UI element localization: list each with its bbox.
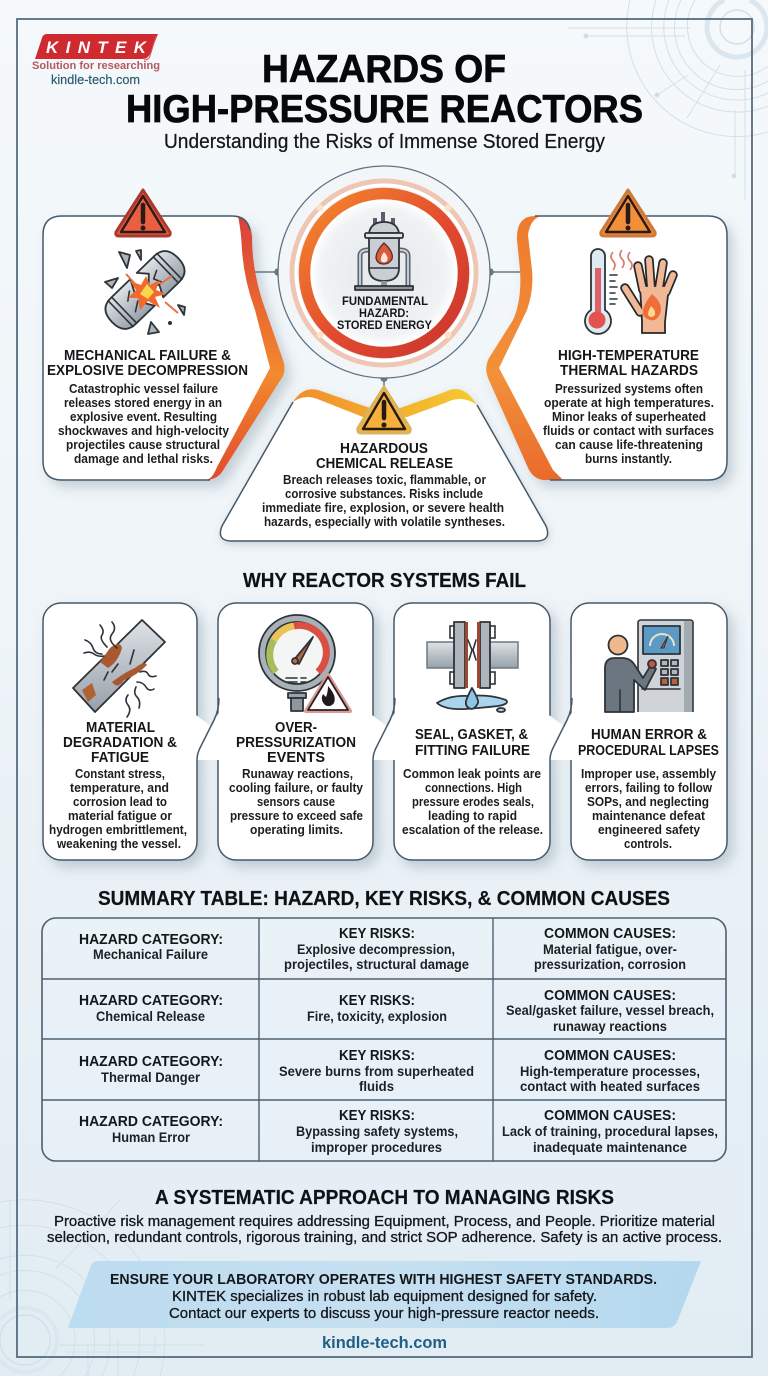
text: human error description: controls.	[624, 836, 672, 851]
table row: mechanical failure	[79, 926, 686, 972]
logo: KINTEK: Solution for researching	[32, 60, 160, 72]
text: chemical release description: immediate fire, explosion, or severe health	[262, 500, 504, 515]
call to action ribbon	[68, 1261, 701, 1328]
heading: material degradation: FATIGUE	[91, 750, 149, 766]
heading: fundamental hazard: FUNDAMENTAL	[342, 296, 428, 308]
table row: human error: Bypassing safety systems,	[296, 1124, 458, 1139]
heading: human error: PROCEDURAL LAPSES	[578, 743, 719, 759]
table row: human error	[79, 1108, 718, 1155]
text: over-pressurization description: sensors cause	[257, 794, 335, 809]
table row: thermal danger: contact with heated surfaces	[520, 1079, 700, 1094]
text: material degradation description: hydrogen embrittlement,	[49, 822, 187, 837]
icon: corroded cracked plate	[73, 620, 165, 717]
table row: thermal danger: HAZARD CATEGORY:	[79, 1054, 223, 1070]
heading: mechanical failure	[47, 348, 248, 379]
heading: material degradation	[63, 720, 177, 766]
heading: seal failure	[415, 727, 530, 759]
table row: chemical release: Chemical Release	[96, 1009, 205, 1024]
text: over-pressurization description: cooling failure, or faulty	[229, 780, 364, 795]
table row: human error: Lack of training, procedural lapses,	[502, 1124, 718, 1139]
heading: chemical release: CHEMICAL RELEASE	[316, 456, 453, 472]
heading: mechanical failure: EXPLOSIVE DECOMPRESSION	[47, 363, 248, 379]
table row: chemical release: COMMON CAUSES:	[544, 988, 676, 1004]
text: mechanical failure description: damage and lethal risks.	[74, 451, 213, 466]
text: seal failure description: connections. High	[425, 780, 522, 795]
table row: human error: COMMON CAUSES:	[544, 1108, 676, 1124]
table row: mechanical failure: pressurization, corrosion	[534, 957, 686, 972]
icon: warning triangle yellow	[358, 387, 410, 433]
heading: human error: HUMAN ERROR &	[591, 727, 707, 743]
text: seal failure description: pressure erodes seals,	[412, 794, 534, 809]
text: mechanical failure description: explosive event. Resulting	[70, 409, 217, 424]
panel: material degradation	[43, 603, 197, 860]
call to action ribbon: Contact our experts to discuss your high-pressure reactor needs.	[169, 1305, 599, 1322]
table row: mechanical failure: KEY RISKS:	[339, 926, 415, 942]
panel: over-pressurization	[218, 603, 373, 860]
logo: KINTEK	[32, 34, 160, 87]
table row: thermal danger: Thermal Danger	[101, 1070, 201, 1085]
text: chemical release description: corrosive substances. Risks include	[285, 486, 483, 501]
table row: thermal danger: KEY RISKS:	[339, 1048, 415, 1064]
text: systematic approach	[47, 1213, 722, 1246]
text: thermal hazards description: Pressurized systems often	[555, 381, 703, 396]
call to action ribbon: ENSURE YOUR LABORATORY OPERATES WITH HIGHEST SAFETY STANDARDS.	[110, 1271, 657, 1288]
heading: fundamental hazard: HAZARD:	[359, 308, 409, 320]
text: systematic approach: selection, redundant controls, rigorous training, and strict SOP adherence. Safety is an active process.	[47, 1229, 722, 1246]
table row: thermal danger: fluids	[359, 1079, 394, 1094]
text: material degradation description: Constant stress,	[75, 766, 165, 781]
text: material degradation description	[49, 766, 187, 851]
text: thermal hazards description: can cause life-threatening	[555, 437, 703, 452]
text: human error description: SOPs, and neglecting	[587, 794, 709, 809]
text: human error description: Improper use, assembly	[581, 766, 717, 781]
text: material degradation description: corrosion lead to	[73, 794, 167, 809]
text: mechanical failure description: releases stored energy in an	[64, 395, 222, 410]
panel: human error	[571, 603, 727, 860]
text: mechanical failure description: shockwaves and high-velocity	[58, 423, 230, 438]
table row: human error: inadequate maintenance	[533, 1140, 687, 1155]
table row: thermal danger	[79, 1048, 700, 1094]
text: thermal hazards description: fluids or contact with surfaces	[543, 423, 714, 438]
heading: mechanical failure: MECHANICAL FAILURE &	[64, 348, 231, 364]
table row: mechanical failure: projectiles, structural damage	[284, 957, 469, 972]
heading: seal failure: SEAL, GASKET, &	[415, 727, 528, 743]
text: chemical release description	[262, 472, 505, 529]
heading: fundamental hazard: STORED ENERGY	[337, 320, 432, 332]
heading: over-pressurization: EVENTS	[267, 750, 325, 766]
table row: human error: HAZARD CATEGORY:	[79, 1114, 223, 1130]
icon: thermometer and burned hand	[585, 249, 673, 334]
table row: human error: Human Error	[112, 1130, 191, 1145]
heading: why reactor systems fail: WHY REACTOR SYSTEMS FAIL	[243, 570, 526, 592]
logo: KINTEK: kindle-tech.com	[51, 72, 140, 87]
heading: thermal hazards: THERMAL HAZARDS	[560, 363, 698, 379]
call to action ribbon: KINTEK specializes in robust lab equipment designed for safety.	[172, 1288, 597, 1305]
text: over-pressurization description: pressure to exceed safe	[230, 808, 363, 823]
table row: chemical release	[79, 988, 714, 1034]
table row: chemical release: runaway reactions	[553, 1019, 667, 1034]
text: material degradation description: weakening the vessel.	[56, 836, 181, 851]
heading: material degradation: MATERIAL	[86, 720, 155, 736]
table row: thermal danger: Severe burns from superheated	[279, 1064, 474, 1079]
text: mechanical failure description: projectiles cause structural	[66, 437, 220, 452]
icon: pressure gauge with fire warning	[259, 615, 350, 711]
text: systematic approach: Proactive risk management requires addressing Equipment, Process, and People. Prioritize material	[54, 1213, 715, 1230]
table row: chemical release: Fire, toxicity, explosion	[307, 1009, 447, 1024]
icon: warning triangle red	[116, 190, 170, 236]
table row: chemical release: KEY RISKS:	[339, 993, 415, 1009]
text: over-pressurization description: Runaway reactions,	[242, 766, 353, 781]
heading: over-pressurization: OVER-	[275, 720, 317, 736]
icon: leaking flange	[427, 622, 518, 712]
subtitle: Understanding the Risks of Immense Stored Energy	[164, 131, 605, 153]
title	[126, 48, 643, 131]
table row: thermal danger: COMMON CAUSES:	[544, 1048, 676, 1064]
table row: human error: improper procedures	[311, 1140, 442, 1155]
text: thermal hazards description	[543, 381, 714, 466]
text: seal failure description: leading to rapid	[428, 808, 517, 823]
text: human error description: engineered safety	[598, 822, 701, 837]
icon: warning triangle orange	[601, 190, 655, 236]
panel: thermal hazards	[486, 190, 727, 480]
icon: reactor vessel	[355, 212, 413, 290]
text: over-pressurization description	[229, 766, 364, 837]
text: mechanical failure description: Catastrophic vessel failure	[69, 381, 218, 396]
heading: over-pressurization	[236, 720, 356, 766]
text: human error description: maintenance defeat	[592, 808, 706, 823]
panel: mechanical failure	[43, 190, 284, 480]
connectors between cause cards	[196, 698, 573, 760]
text: human error description: errors, failing to follow	[585, 780, 712, 795]
table row: mechanical failure: HAZARD CATEGORY:	[79, 932, 223, 948]
text: seal failure description	[402, 766, 543, 837]
text: over-pressurization description: operating limits.	[250, 822, 343, 837]
text: material degradation description: material fatigue or	[68, 808, 172, 823]
heading: thermal hazards	[558, 348, 699, 379]
panel: fundamental hazard circle	[278, 166, 490, 378]
text: seal failure description: escalation of the release.	[402, 822, 543, 837]
table row: mechanical failure: Mechanical Failure	[93, 947, 208, 962]
table row: thermal danger: High-temperature processes,	[520, 1064, 700, 1079]
text: seal failure description: Common leak points are	[403, 766, 541, 781]
heading: thermal hazards: HIGH-TEMPERATURE	[558, 348, 699, 364]
text: thermal hazards description: operate at high temperatures.	[544, 395, 714, 410]
text: material degradation description: temperature, and	[70, 780, 169, 795]
icon: ruptured vessel	[99, 245, 191, 335]
heading: human error	[578, 727, 719, 759]
heading: over-pressurization: PRESSURIZATION	[236, 735, 356, 751]
heading: fundamental hazard	[337, 296, 432, 332]
heading: material degradation: DEGRADATION &	[63, 735, 177, 751]
text: thermal hazards description: Minor leaks of superheated	[552, 409, 706, 424]
panel: seal and gasket failure	[394, 603, 550, 860]
table row: mechanical failure: Explosive decompression,	[297, 942, 455, 957]
text: human error description	[581, 766, 717, 851]
footer website link: kindle-tech.com	[322, 1333, 447, 1352]
heading: chemical release	[316, 441, 453, 472]
table row: chemical release: HAZARD CATEGORY:	[79, 993, 223, 1009]
summary table	[42, 918, 726, 1161]
text: thermal hazards description: burns instantly.	[585, 451, 672, 466]
connector lines	[250, 269, 520, 386]
icon: operator at control panel	[605, 620, 693, 712]
title: HIGH-PRESSURE REACTORS	[126, 88, 643, 131]
text: mechanical failure description	[58, 381, 230, 466]
heading: seal failure: FITTING FAILURE	[415, 743, 530, 759]
heading: summary table: SUMMARY TABLE: HAZARD, KEY RISKS, & COMMON CAUSES	[98, 888, 670, 910]
table row: chemical release: Seal/gasket failure, vessel breach,	[506, 1003, 714, 1018]
table row: human error: KEY RISKS:	[339, 1108, 415, 1124]
table row: mechanical failure: COMMON CAUSES:	[544, 926, 676, 942]
title: HAZARDS OF	[262, 48, 506, 91]
heading: systematic approach: A SYSTEMATIC APPROACH TO MANAGING RISKS	[155, 1187, 614, 1209]
text: chemical release description: hazards, especially with volatile syntheses.	[264, 514, 505, 529]
heading: chemical release: HAZARDOUS	[340, 441, 428, 457]
text: chemical release description: Breach releases toxic, flammable, or	[283, 472, 486, 487]
table row: mechanical failure: Material fatigue, over-	[543, 942, 677, 957]
logo: KINTEK: KINTEK	[46, 38, 148, 57]
panel: chemical release	[220, 387, 548, 541]
